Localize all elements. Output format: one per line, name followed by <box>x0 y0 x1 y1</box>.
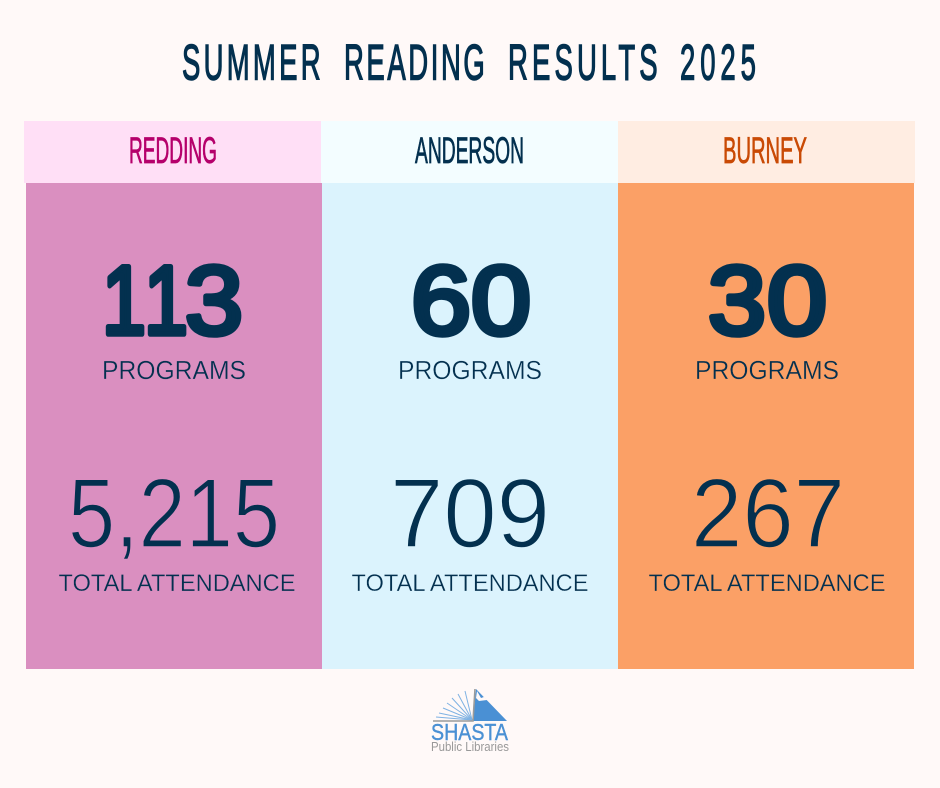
Redding header: REDDING <box>129 130 217 171</box>
Anderson programs count: 6 <box>411 246 471 355</box>
Redding programs count: 1 <box>144 246 188 355</box>
Anderson programs label: PROGRAMS <box>398 355 542 385</box>
Burney programs count: 3 <box>708 246 766 355</box>
icon: book and mountain <box>433 689 507 721</box>
title: RESULTS <box>508 34 658 91</box>
Redding attendance label: TOTAL ATTENDANCE <box>58 570 296 597</box>
Anderson attendance label: TOTAL ATTENDANCE <box>352 570 588 597</box>
Burney programs count: 0 <box>767 246 827 355</box>
title: READING <box>344 34 485 91</box>
Burney header: BURNEY <box>723 130 807 171</box>
title: 2025 <box>680 34 756 91</box>
Anderson header: ANDERSON <box>415 130 524 171</box>
Burney body <box>618 183 914 669</box>
panel: Anderson <box>321 121 618 669</box>
Redding programs count: 3 <box>185 246 243 355</box>
Anderson body <box>322 183 618 669</box>
Redding programs count: 1 <box>102 246 146 355</box>
Anderson attendance count: 709 <box>390 458 550 568</box>
Anderson programs count <box>411 246 531 355</box>
Redding programs label: PROGRAMS <box>102 355 246 385</box>
logo subtitle: Public Libraries <box>431 740 509 754</box>
Redding header <box>24 121 321 183</box>
Anderson header <box>321 121 618 183</box>
Redding programs count <box>102 246 243 355</box>
title <box>182 34 756 91</box>
Burney attendance count: 267 <box>691 458 845 568</box>
Redding attendance count: 5,215 <box>68 458 280 568</box>
Burney header <box>618 121 915 183</box>
title: SUMMER <box>182 34 321 91</box>
Anderson programs count: 0 <box>471 246 531 355</box>
logo: Shasta Public Libraries <box>431 689 509 754</box>
panel: Redding <box>24 121 322 669</box>
Redding body <box>26 183 322 669</box>
Burney attendance label: TOTAL ATTENDANCE <box>648 570 886 597</box>
Burney programs count <box>708 246 827 355</box>
Burney programs label: PROGRAMS <box>695 355 839 385</box>
panel: Burney <box>618 121 915 669</box>
logo wordmark: SHASTA <box>431 719 509 745</box>
